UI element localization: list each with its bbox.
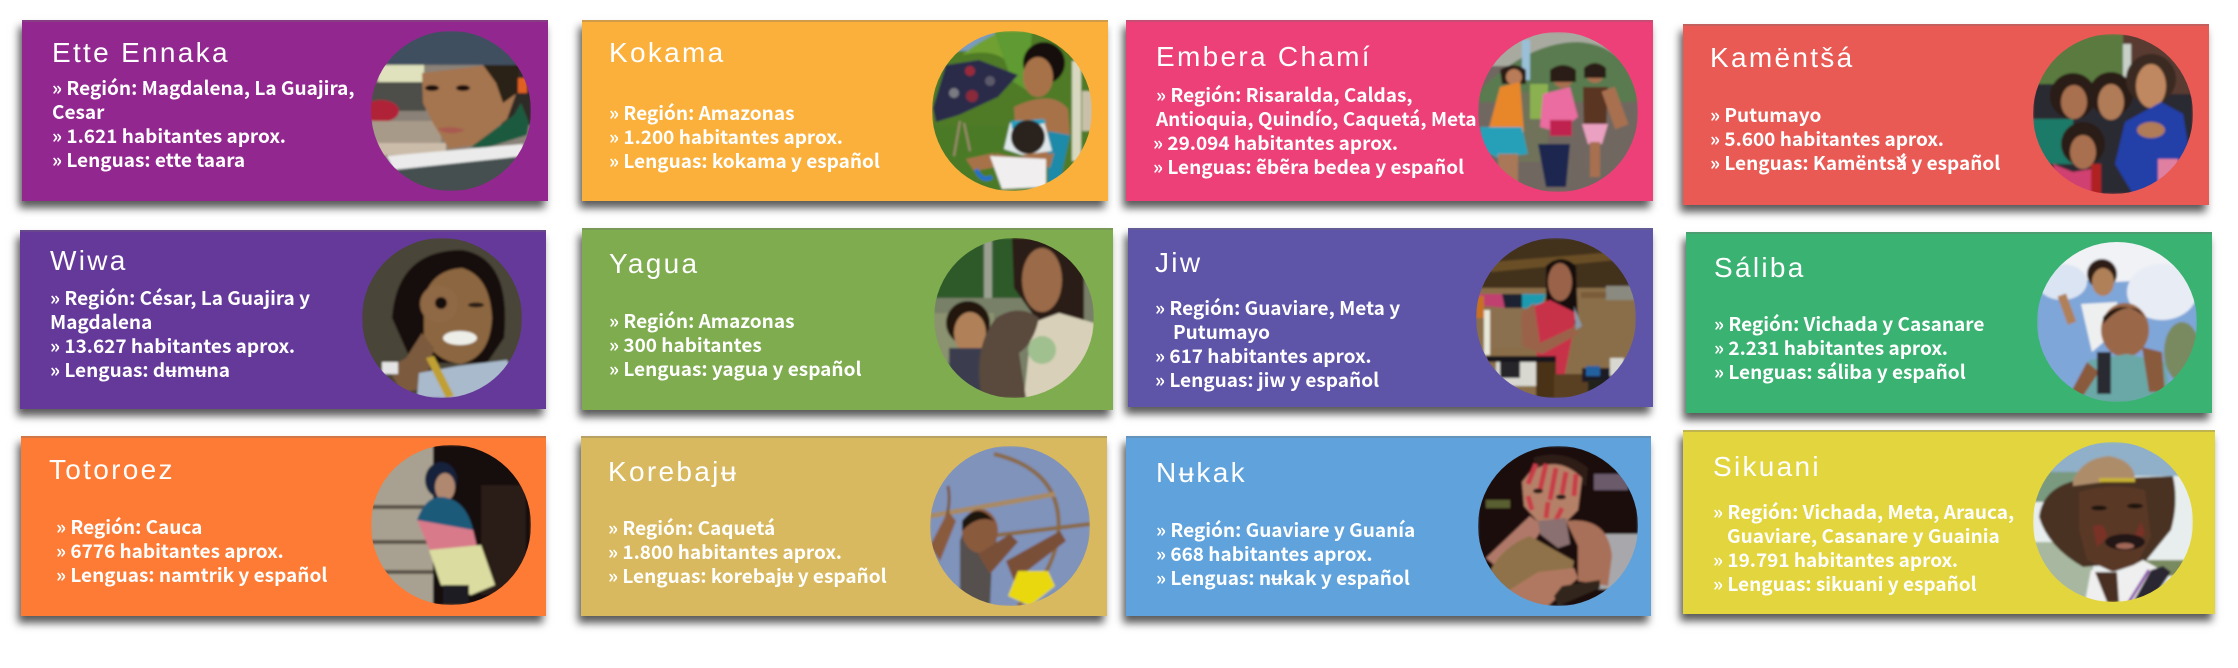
text block: Wiwa facts: » 13.627 habitantes aprox. xyxy=(50,332,295,359)
text block: Ette Ennaka facts: » 1.621 habitantes aprox. xyxy=(52,122,286,149)
text block: Embera Chamí facts: » Lenguas: ẽbẽra bedea y español xyxy=(1153,153,1464,180)
photo: children running xyxy=(1478,32,1638,192)
text block: Ette Ennaka facts xyxy=(52,74,355,173)
photo: boy in cap xyxy=(371,31,531,191)
heading: Wiwa: Wiwa xyxy=(50,245,128,276)
text block: Sikuani facts: » Región: Vichada, Meta, Arauca, xyxy=(1713,498,2014,525)
text block: Nʉkak facts xyxy=(1156,516,1415,591)
text block: Kokama facts xyxy=(609,99,880,174)
photo: man carrying child xyxy=(2037,242,2197,402)
text block: Korebajʉ facts xyxy=(608,514,887,589)
text block: Jiw facts xyxy=(1155,294,1400,393)
text block: Korebajʉ facts: » Lenguas: korebajʉ y español xyxy=(608,562,887,589)
text block: Sáliba facts xyxy=(1714,310,1984,385)
panel: Kamëntšá xyxy=(1683,24,2209,205)
text block: Yagua facts: » 300 habitantes xyxy=(609,331,762,358)
panel: Totoroez xyxy=(21,436,546,616)
text block: Embera Chamí facts xyxy=(1153,81,1477,180)
text block: Kokama facts: » Región: Amazonas xyxy=(609,99,794,126)
text block: Sikuani facts xyxy=(1713,498,2014,597)
text block: Sikuani facts: » Lenguas: sikuani y español xyxy=(1713,570,1977,597)
text block: Ette Ennaka facts: » Región: Magdalena, La Guajira, xyxy=(52,74,355,101)
text block: Kamëntšá facts xyxy=(1710,101,2000,176)
photo: girl with baby xyxy=(932,31,1092,191)
heading: Yagua: Yagua xyxy=(609,248,699,279)
text block: Yagua facts xyxy=(609,307,862,382)
text block: Embera Chamí facts: Antioquia, Quindío, Caquetá, Meta xyxy=(1156,105,1477,132)
text block: Jiw facts: » 617 habitantes aprox. xyxy=(1155,342,1372,369)
text block: Totoroez facts: » Lenguas: namtrik y español xyxy=(56,561,327,588)
panel: Ette Ennaka xyxy=(22,20,548,201)
heading: Embera Chamí: Embera Chamí xyxy=(1156,41,1372,72)
text block: Ette Ennaka facts: Cesar xyxy=(52,98,104,125)
photo: girl with hand over eye xyxy=(362,238,522,398)
text block: Wiwa facts: Magdalena xyxy=(50,308,152,335)
text block: Sáliba facts: » Lenguas: sáliba y español xyxy=(1714,358,1966,385)
text block: Sáliba facts: » Región: Vichada y Casanare xyxy=(1714,310,1984,337)
text block: Korebajʉ facts: » 1.800 habitantes aprox. xyxy=(608,538,842,565)
text block: Jiw facts: » Región: Guaviare, Meta y xyxy=(1155,294,1400,321)
text block: Totoroez facts xyxy=(56,513,327,588)
text block: Korebajʉ facts: » Región: Caquetá xyxy=(608,514,775,541)
text block: Wiwa facts: » Región: César, La Guajira y xyxy=(50,284,310,311)
text block: Embera Chamí facts: » Región: Risaralda, Caldas, xyxy=(1156,81,1413,108)
panel: Wiwa xyxy=(20,230,546,409)
text block: Totoroez facts: » Región: Cauca xyxy=(56,513,202,540)
photo: man with painted face and monkey xyxy=(1478,446,1638,606)
text block: Kamëntšá facts: » 5.600 habitantes aprox. xyxy=(1710,125,1944,152)
heading: Ette Ennaka: Ette Ennaka xyxy=(52,37,230,68)
text block: Nʉkak facts: » Región: Guaviare y Guanía xyxy=(1156,516,1415,543)
text block: Sáliba facts: » 2.231 habitantes aprox. xyxy=(1714,334,1948,361)
heading: Kamëntšá: Kamëntšá xyxy=(1710,42,1854,73)
panel: Embera Chamí xyxy=(1126,20,1653,201)
photo: woman in hut xyxy=(1476,238,1636,398)
photo: elderly woman at door xyxy=(371,445,531,605)
text block: Nʉkak facts: » 668 habitantes aprox. xyxy=(1156,540,1373,567)
photo: group of children xyxy=(2033,34,2193,194)
text block: Embera Chamí facts: » 29.094 habitantes aprox. xyxy=(1153,129,1398,156)
text block: Kokama facts: » Lenguas: kokama y español xyxy=(609,147,880,174)
panel: Jiw xyxy=(1128,228,1653,407)
panel: Kokama xyxy=(582,20,1108,201)
panel: Sáliba xyxy=(1686,232,2212,413)
text block: Sikuani facts: » 19.791 habitantes aprox. xyxy=(1713,546,1958,573)
text block: Nʉkak facts: » Lenguas: nʉkak y español xyxy=(1156,564,1410,591)
heading: Totoroez: Totoroez xyxy=(49,454,175,485)
heading: Jiw: Jiw xyxy=(1155,247,1202,278)
photo: boy with bow and arrow xyxy=(930,446,1090,606)
text block: Totoroez facts: » 6776 habitantes aprox. xyxy=(56,537,284,564)
text block: Kokama facts: » 1.200 habitantes aprox. xyxy=(609,123,843,150)
text block: Ette Ennaka facts: » Lenguas: ette taara xyxy=(52,146,245,173)
photo: girl and child with sloth xyxy=(934,238,1094,398)
text block: Jiw facts: » Lenguas: jiw y español xyxy=(1155,366,1379,393)
text block: Sikuani facts: Guaviare, Casanare y Guainia xyxy=(1727,522,2000,549)
panel: Nʉkak xyxy=(1126,436,1651,616)
text block: Wiwa facts xyxy=(50,284,310,383)
heading: Kokama: Kokama xyxy=(609,37,726,68)
text block: Yagua facts: » Lenguas: yagua y español xyxy=(609,355,861,382)
text block: Kamëntšá facts: » Putumayo xyxy=(1710,101,1821,128)
photo: man in wide hat xyxy=(2033,442,2193,602)
heading: Nʉkak: Nʉkak xyxy=(1156,457,1247,488)
text block: Yagua facts: » Región: Amazonas xyxy=(609,307,794,334)
heading: Sikuani: Sikuani xyxy=(1713,451,1821,482)
panel: Korebajʉ xyxy=(581,436,1107,616)
heading: Korebajʉ: Korebajʉ xyxy=(608,456,738,487)
panel: Sikuani xyxy=(1683,430,2215,614)
text block: Jiw facts: Putumayo xyxy=(1173,318,1270,345)
text block: Wiwa facts: » Lenguas: dʉmʉna xyxy=(50,356,230,383)
panel: Yagua xyxy=(582,228,1113,410)
text block: Kamëntšá facts: » Lenguas: Kamëntšá y español xyxy=(1710,149,2000,176)
heading: Sáliba: Sáliba xyxy=(1714,252,1806,283)
